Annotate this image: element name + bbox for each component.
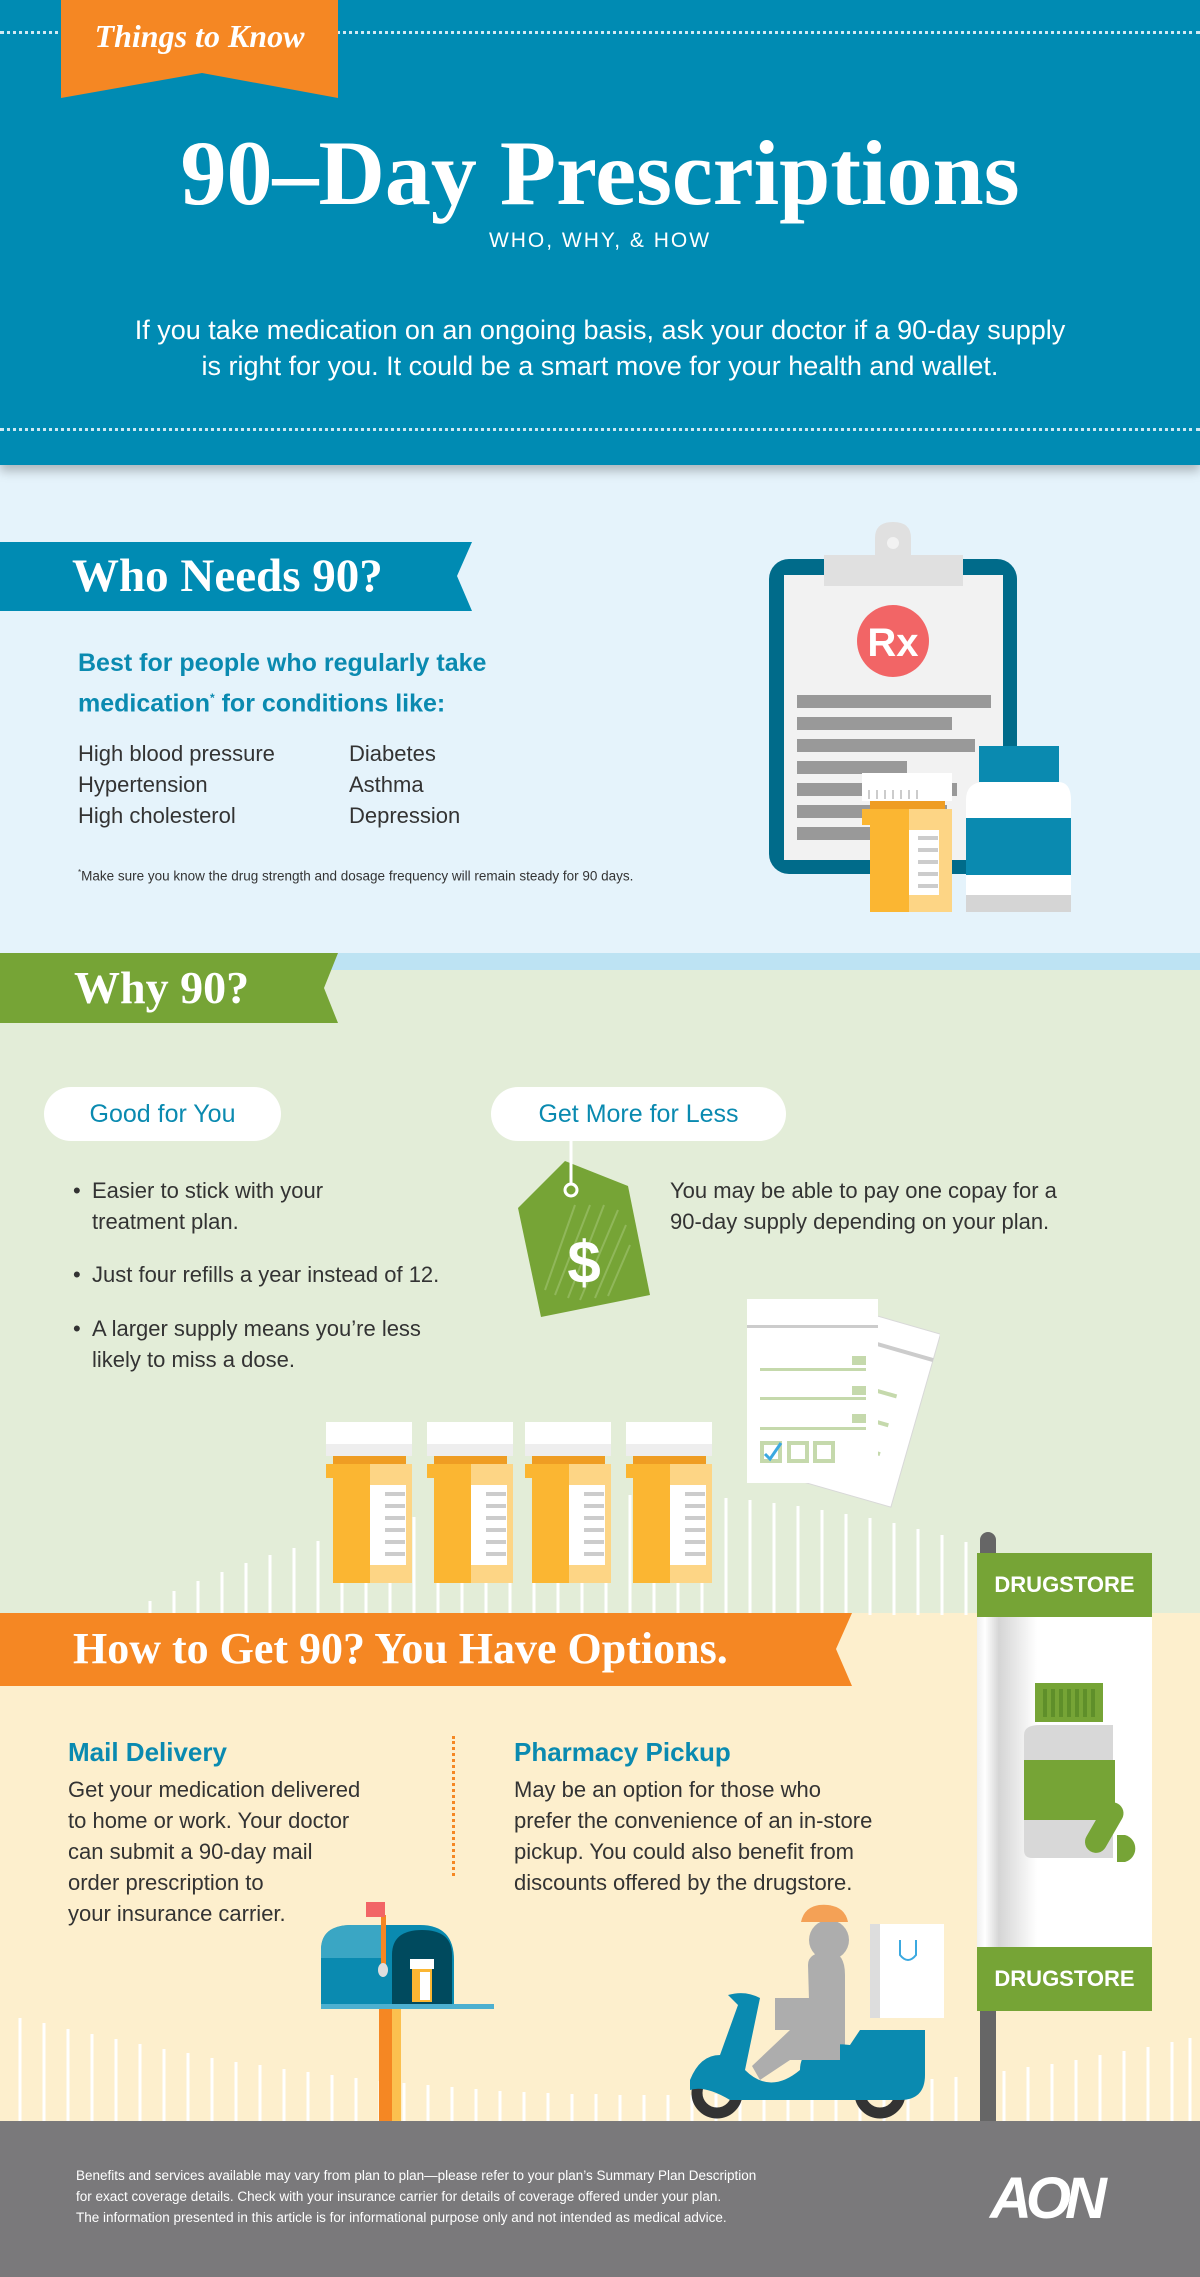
text: *Make sure you know the drug strength and dosage frequency will remain steady for 90 days. — [78, 868, 633, 884]
heading: how to get 90: How to Get 90? You Have Options. — [73, 1624, 728, 1673]
text: Depression — [349, 803, 460, 828]
panel: mail delivery: Mail Delivery — [68, 1737, 227, 1767]
badge: things to know: Things to Know — [95, 18, 304, 54]
disclaimer text — [76, 2168, 756, 2225]
disclaimer text: The information presented in this article is for informational purpose only and not intended as medical advice. — [76, 2210, 727, 2225]
bullet list: treatment plan. — [92, 1209, 239, 1234]
icon: pill bottles row — [326, 1422, 712, 1583]
panel: mail delivery: order prescription to — [68, 1870, 264, 1895]
pill heading: Good for You — [90, 1100, 235, 1128]
bullet list: • — [73, 1262, 81, 1287]
bullet list: likely to miss a dose. — [92, 1347, 295, 1372]
icon: mailbox — [321, 1902, 494, 2121]
badge: things to know — [61, 0, 338, 98]
icon: price tag: $ — [567, 1229, 601, 1296]
heading: who needs 90 — [0, 542, 472, 611]
panel: pharmacy pickup — [514, 1737, 872, 1895]
panel: pharmacy pickup: Pharmacy Pickup — [514, 1737, 731, 1767]
text: copay — [670, 1178, 1057, 1234]
intro text: is right for you. It could be a smart move for your health and wallet. — [202, 351, 998, 381]
logo: aon: AON — [990, 2166, 1101, 2231]
text: who needs list: medication* for conditions like: — [78, 689, 445, 717]
icon: price tag — [518, 1141, 650, 1317]
icon: clipboard and bottles — [769, 522, 1071, 912]
bullet list: A larger supply means you’re less — [92, 1316, 421, 1341]
bullet list: • — [73, 1178, 81, 1203]
icon: drugstore sign: DRUGSTORE — [994, 1966, 1135, 1991]
text: who needs list: Best for people who regularly take — [78, 649, 486, 677]
disclaimer text: Benefits and services available may vary from plan to plan—please refer to your plan’s Summary Plan Description — [76, 2168, 756, 2183]
bullet list — [73, 1178, 439, 1372]
bullet list: Easier to stick with your — [92, 1178, 323, 1203]
text: High cholesterol — [78, 803, 236, 828]
panel: mail delivery: can submit a 90-day mail — [68, 1839, 313, 1864]
panel: mail delivery: your insurance carrier. — [68, 1901, 286, 1926]
header panel — [0, 0, 1200, 465]
text: who needs list — [78, 649, 633, 884]
text: copay: 90-day supply depending on your plan. — [670, 1209, 1049, 1234]
text: Hypertension — [78, 772, 208, 797]
footer — [0, 2121, 1200, 2277]
title: 90–Day Prescriptions — [180, 122, 1020, 224]
heading: why 90: Why 90? — [74, 962, 249, 1013]
text: High blood pressure — [78, 741, 275, 766]
panel: good for you — [44, 1087, 439, 1372]
pill heading — [491, 1087, 786, 1141]
intro text — [135, 315, 1066, 381]
text: Diabetes — [349, 741, 436, 766]
panel: mail delivery: Get your medication delivered — [68, 1777, 360, 1802]
icon: drugstore sign — [977, 1532, 1152, 2121]
subtitle: WHO, WHY, & HOW — [489, 229, 711, 252]
icon: clipboard and bottles: Rx — [867, 621, 919, 665]
bullet list: Just four refills a year instead of 12. — [92, 1262, 439, 1287]
bullet list: • — [73, 1316, 81, 1341]
heading: how to get 90 — [0, 1613, 852, 1686]
icon: forms — [747, 1299, 940, 1508]
panel: mail delivery: to home or work. Your doctor — [68, 1808, 349, 1833]
pill heading — [44, 1087, 281, 1141]
panel: mail delivery — [68, 1737, 360, 1926]
panel: get more for less — [491, 1087, 1057, 1317]
icon: scooter rider — [690, 1904, 944, 2118]
disclaimer text: for exact coverage details. Check with your insurance carrier for details of coverage offered under your plan. — [76, 2189, 721, 2204]
panel: pharmacy pickup: May be an option for those who — [514, 1777, 821, 1802]
heading: why 90 — [0, 953, 338, 1023]
intro text: If you take medication on an ongoing basis, ask your doctor if a 90-day supply — [135, 315, 1065, 345]
icon: drugstore sign: DRUGSTORE — [994, 1572, 1135, 1597]
panel: pharmacy pickup: pickup. You could also benefit from — [514, 1839, 854, 1864]
heading: who needs 90: Who Needs 90? — [72, 550, 383, 602]
text: Asthma — [349, 772, 424, 797]
text: copay: You may be able to pay one copay for a — [670, 1178, 1057, 1203]
panel: pharmacy pickup: prefer the convenience of an in-store — [514, 1808, 872, 1833]
pill heading: Get More for Less — [538, 1100, 739, 1128]
panel: pharmacy pickup: discounts offered by the drugstore. — [514, 1870, 852, 1895]
